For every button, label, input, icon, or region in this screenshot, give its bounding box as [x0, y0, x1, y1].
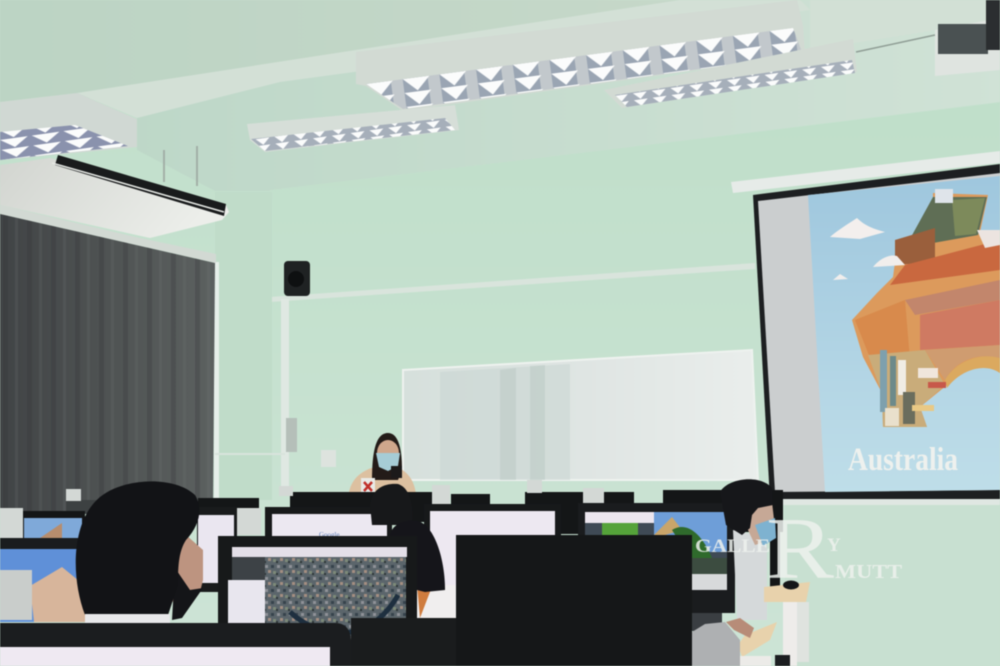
small paper signs [0, 480, 604, 538]
slide: title: Australia [848, 442, 958, 478]
monitor: university website [578, 503, 735, 613]
monitor: Google page: Google [319, 531, 340, 539]
foreground laptop [0, 618, 456, 666]
whiteboard [403, 350, 758, 480]
watermark: Gallery RMUTT: MUTT [835, 561, 903, 583]
seated person: hair back [370, 484, 412, 525]
air conditioner [0, 155, 229, 263]
watermark: Gallery RMUTT: GALLE [695, 536, 770, 557]
watermark: Gallery RMUTT: R [766, 501, 834, 598]
curtain [0, 214, 215, 512]
slide: clouds [830, 218, 885, 239]
presenter [349, 433, 416, 494]
wall under screen [770, 499, 1000, 666]
watermark: Gallery RMUTT [695, 501, 903, 598]
monitor: satellite map [218, 536, 417, 666]
monitor: second row left [23, 511, 85, 539]
left student's monitor [0, 538, 103, 622]
monitor: second row centre-left [197, 507, 237, 592]
wall speaker [284, 261, 310, 296]
foreground monitor: back of screen [456, 535, 692, 666]
monitor: blank page [424, 504, 561, 594]
back row monitors [66, 490, 783, 600]
student head in foreground [76, 481, 203, 623]
seated woman [390, 521, 456, 620]
ceiling light: right [604, 39, 857, 108]
slide: Australia map [852, 189, 1000, 427]
monitor: Google page [265, 507, 392, 539]
ceiling light: left [0, 93, 137, 160]
man with blue mask [720, 479, 776, 620]
x sign [361, 478, 375, 494]
projector [856, 0, 1000, 76]
watermark: Gallery RMUTT: Y [827, 535, 841, 556]
ceiling light: large centre [356, 0, 805, 111]
slide: sky [808, 176, 1000, 492]
desks and mouse [737, 580, 810, 666]
student sleeve, keyboard and hand [692, 613, 754, 666]
ceiling light: middle [247, 105, 459, 152]
back wall [163, 103, 1000, 666]
projection screen [731, 151, 1000, 500]
